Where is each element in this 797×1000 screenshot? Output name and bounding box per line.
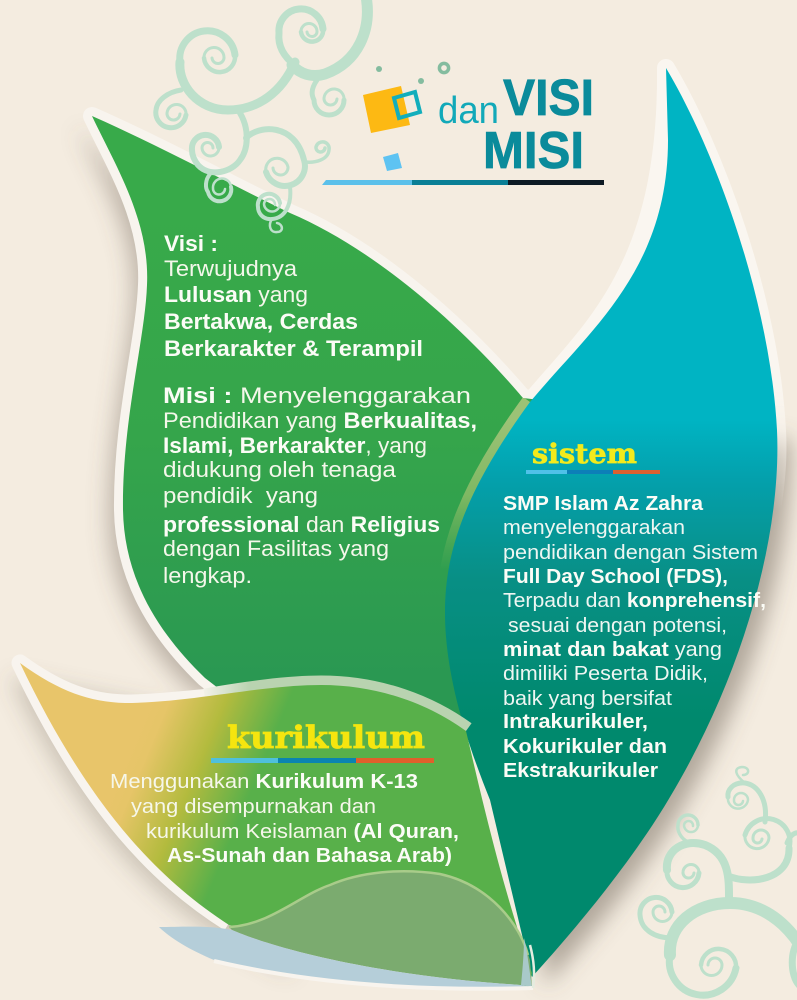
title: dan visi misi: VISI bbox=[503, 69, 594, 126]
text block: sistem: minat dan bakat yang bbox=[503, 639, 722, 661]
text block: misi: Misi : Menyelenggarakan bbox=[163, 383, 471, 408]
heading: kurikulum: kurikulum bbox=[227, 720, 425, 756]
swirl ornament: top bbox=[156, 0, 367, 232]
text block: kurikulum: As-Sunah dan Bahasa Arab) bbox=[167, 845, 452, 867]
text block: misi: pendidik yang bbox=[163, 483, 318, 508]
panel: teal leaf border bbox=[530, 68, 777, 510]
title: dan visi misi bbox=[438, 69, 594, 180]
text block: kurikulum: yang disempurnakan dan bbox=[131, 796, 376, 818]
text block: visi: Bertakwa, Cerdas bbox=[164, 309, 358, 334]
panel: visi misi green leaf bbox=[92, 116, 540, 740]
heading: sistem: sistem bbox=[532, 439, 637, 470]
text block: sistem: Intrakurikuler, bbox=[503, 711, 648, 733]
text block: misi: professional dan Religius bbox=[163, 512, 440, 537]
text block: sistem: sesuai dengan potensi, bbox=[508, 615, 727, 637]
text block: visi: Lulusan yang bbox=[164, 282, 308, 307]
text block: misi: didukung oleh tenaga bbox=[163, 457, 397, 482]
swirl ornament: bottom right bbox=[640, 767, 797, 995]
text block: sistem: dimiliki Peserta Didik, bbox=[503, 663, 708, 685]
text block: sistem: Ekstrakurikuler bbox=[503, 760, 658, 782]
panel: sistem teal leaf bbox=[445, 68, 777, 977]
text block: sistem: Kokurikuler dan bbox=[503, 736, 667, 758]
heading: kurikulum bbox=[211, 720, 434, 763]
text block: sistem: Terpadu dan konprehensif, bbox=[503, 590, 766, 612]
text block: misi: Pendidikan yang Berkualitas, bbox=[163, 408, 477, 433]
text block: visi bbox=[164, 231, 423, 361]
title: dan visi misi: MISI bbox=[483, 122, 584, 180]
icon: logo squares and dots bbox=[363, 63, 449, 171]
text block: sistem: pendidikan dengan Sistem bbox=[503, 542, 758, 564]
text block: sistem: menyelenggarakan bbox=[503, 517, 685, 539]
text block: misi: Islami, Berkarakter, yang bbox=[163, 433, 427, 458]
heading: sistem bbox=[526, 439, 660, 474]
text block: visi: Berkarakter & Terampil bbox=[164, 336, 423, 361]
text block: sistem: Full Day School (FDS), bbox=[503, 566, 728, 588]
text block: sistem bbox=[503, 493, 766, 782]
teal leaf translucent edge over green bbox=[442, 398, 530, 560]
text block: visi: Visi : bbox=[164, 231, 218, 256]
panel: kurikulum leaf bbox=[20, 663, 532, 987]
text block: misi: dengan Fasilitas yang bbox=[163, 536, 389, 561]
text block: kurikulum: Menggunakan Kurikulum K-13 bbox=[110, 771, 418, 793]
text block: sistem: baik yang bersifat bbox=[503, 688, 672, 710]
text block: visi: Terwujudnya bbox=[164, 256, 298, 281]
kurikulum lower fold with wave bbox=[159, 871, 534, 989]
title: dan visi misi: dan bbox=[438, 90, 499, 132]
text block: misi bbox=[163, 383, 477, 588]
text block: misi: lengkap. bbox=[163, 563, 252, 588]
text block: kurikulum bbox=[110, 771, 459, 867]
text block: kurikulum: kurikulum Keislaman (Al Quran, bbox=[146, 821, 459, 843]
text block: sistem: SMP Islam Az Zahra bbox=[503, 493, 704, 515]
title underline bbox=[322, 180, 604, 185]
